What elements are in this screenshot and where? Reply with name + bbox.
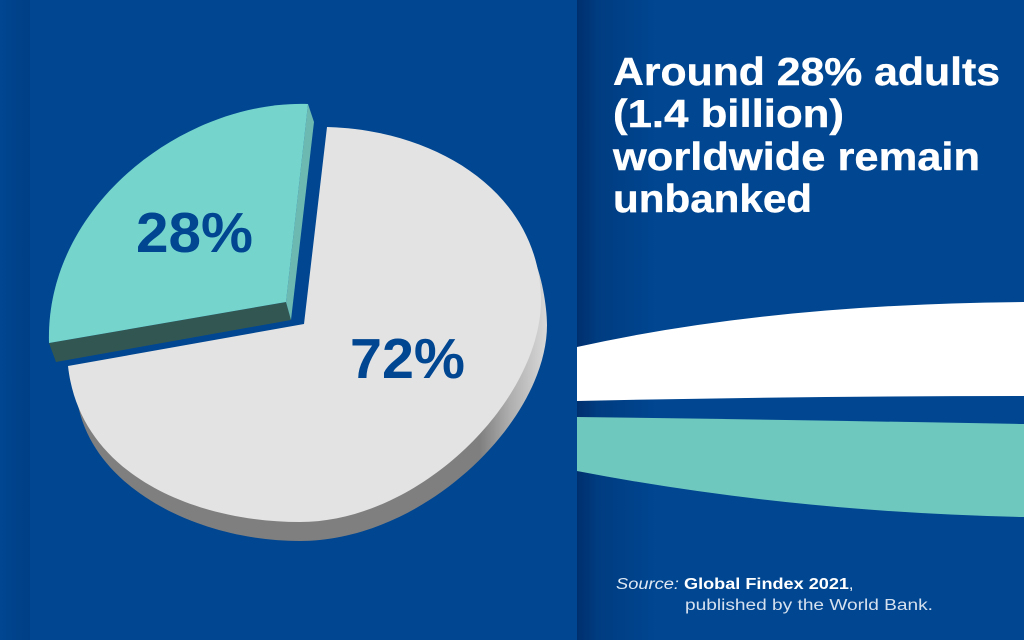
label: 72%: 72%	[350, 327, 465, 391]
pie slice: 28% side faces	[49, 104, 314, 362]
ribbon: teal	[577, 417, 1024, 517]
panel: pie chart	[49, 104, 547, 541]
ribbon: white	[577, 302, 1024, 401]
label: 28%: 28%	[136, 201, 253, 265]
pie slice: 72%	[68, 127, 541, 522]
source note: Global Findex 2021	[684, 576, 849, 593]
source note: Source:	[616, 576, 679, 593]
heading: Around 28% adults	[613, 51, 1000, 94]
source note: ,	[849, 576, 853, 593]
heading: (1.4 billion)	[613, 93, 844, 136]
source note: published by the World Bank.	[685, 597, 933, 614]
heading	[612, 51, 1000, 221]
heading: worldwide remain	[612, 136, 980, 179]
pie slice: 72% side	[78, 250, 547, 541]
source note	[616, 576, 933, 614]
heading: unbanked	[613, 178, 812, 221]
pie slice: 28%	[49, 104, 308, 343]
